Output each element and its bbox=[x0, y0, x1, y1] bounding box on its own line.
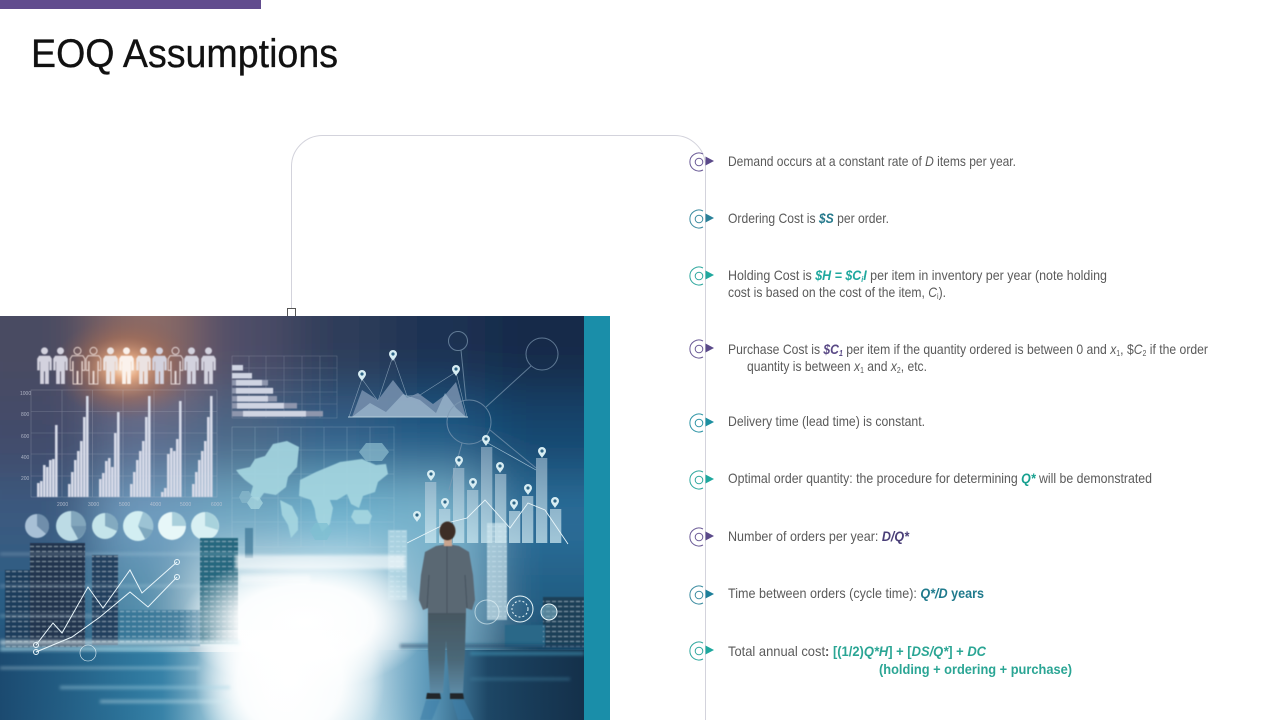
small handle square bbox=[288, 308, 296, 316]
item 5: delivery time bbox=[690, 413, 925, 432]
column chart with grid: 5000 bbox=[119, 502, 130, 508]
teal side band bbox=[584, 316, 610, 720]
item 4: purchase cost: x bbox=[1109, 341, 1117, 357]
item 4: purchase cost: 2 bbox=[897, 366, 901, 375]
list of EOQ assumptions bbox=[690, 153, 1208, 677]
item 4: purchase cost: 2 bbox=[1143, 349, 1147, 358]
item 4: purchase cost: 1 bbox=[839, 349, 843, 358]
photo background colour field bbox=[0, 316, 584, 720]
column chart with grid: 1000 bbox=[20, 391, 31, 397]
item 4: purchase cost: 1 bbox=[860, 366, 864, 375]
people icons row bbox=[37, 347, 216, 384]
item 3: holding cost: ). bbox=[939, 284, 946, 300]
column chart with grid: 5000 bbox=[180, 502, 191, 508]
item 2: ordering cost bbox=[690, 210, 889, 228]
item 4: purchase cost: C bbox=[1134, 341, 1143, 357]
city skyline buildings bbox=[5, 523, 584, 648]
column chart with grid: 200 bbox=[21, 476, 30, 482]
item 5: delivery time: Delivery time (lead time) is constant. bbox=[728, 413, 925, 429]
item 9: total annual cost: Total annual cost: [(1/2)Q*H] + [DS/Q*] + DC bbox=[728, 643, 987, 659]
white light burst bbox=[180, 554, 430, 720]
mountain area chart bbox=[348, 350, 468, 417]
item 4: purchase cost bbox=[690, 340, 1208, 375]
column chart with grid: 800 bbox=[21, 412, 30, 418]
item 3: holding cost: cost is based on the cost of the item, C bbox=[728, 284, 955, 300]
title: EOQ Assumptions bbox=[31, 32, 338, 76]
network circles bbox=[447, 332, 558, 490]
item 4: purchase cost: , etc. bbox=[901, 358, 927, 374]
item 4: purchase cost: 1 bbox=[1116, 349, 1121, 358]
horizontal bar chart bbox=[232, 356, 337, 418]
horizontal light streaks bbox=[0, 553, 584, 703]
item 3: holding cost: I bbox=[863, 267, 868, 283]
item 4: purchase cost: Purchase Cost is $C bbox=[728, 341, 841, 357]
column chart with grid: 600 bbox=[21, 434, 30, 440]
column chart with grid: 400 bbox=[21, 455, 30, 461]
item 2: ordering cost: Ordering Cost is $S per order. bbox=[728, 210, 889, 226]
line charts over skyline bbox=[34, 560, 180, 661]
right bar chart with pins bbox=[407, 435, 568, 544]
column chart with grid bbox=[20, 390, 222, 508]
item 8: time between orders: Time between orders (cycle time): Q*/D years bbox=[728, 585, 984, 601]
orange light glow bbox=[64, 329, 182, 411]
item 7: number of orders: Number of orders per year: D/Q* bbox=[728, 528, 909, 544]
photo: analyst facing data skyline bbox=[0, 316, 584, 720]
world map with hexagons bbox=[232, 427, 394, 547]
businessman seen from behind bbox=[419, 522, 475, 720]
item 4: purchase cost: , $ bbox=[1120, 341, 1134, 357]
water reflection bands bbox=[0, 650, 584, 720]
rounded frame outline bbox=[291, 135, 706, 720]
column chart with grid: 6000 bbox=[211, 502, 222, 508]
item 3: holding cost bbox=[690, 267, 1107, 301]
item 6: optimal order quantity: Optimal order quantity: the procedure for determining Q* will be demonstrated bbox=[728, 470, 1152, 486]
item 1: demand: Demand occurs at a constant rate of D items per year. bbox=[728, 153, 1016, 169]
column chart with grid: 2000 bbox=[57, 502, 68, 508]
item 4: purchase cost: if the order bbox=[1146, 341, 1208, 357]
item 4: purchase cost: x bbox=[890, 358, 898, 374]
item 3: holding cost: i bbox=[861, 275, 864, 284]
item 3: holding cost: i bbox=[937, 292, 939, 301]
item 9: total annual cost: (holding + ordering + purchase) bbox=[879, 661, 1072, 677]
column chart with grid: 4000 bbox=[150, 502, 161, 508]
item 9: total annual cost bbox=[690, 642, 1072, 677]
item 4: purchase cost: and bbox=[864, 358, 891, 374]
item 3: holding cost: per item in inventory per year (note holding bbox=[871, 267, 1137, 283]
column chart with grid: 3000 bbox=[88, 502, 99, 508]
data dial icons bbox=[475, 596, 557, 624]
item 4: purchase cost: per item if the quantity ordered is between 0 and bbox=[843, 341, 1110, 357]
item 4: purchase cost: quantity is between x bbox=[747, 358, 867, 374]
pie charts bbox=[25, 511, 219, 541]
top accent bar bbox=[0, 0, 261, 9]
item 3: holding cost: Holding Cost is $H = $C bbox=[728, 267, 867, 283]
